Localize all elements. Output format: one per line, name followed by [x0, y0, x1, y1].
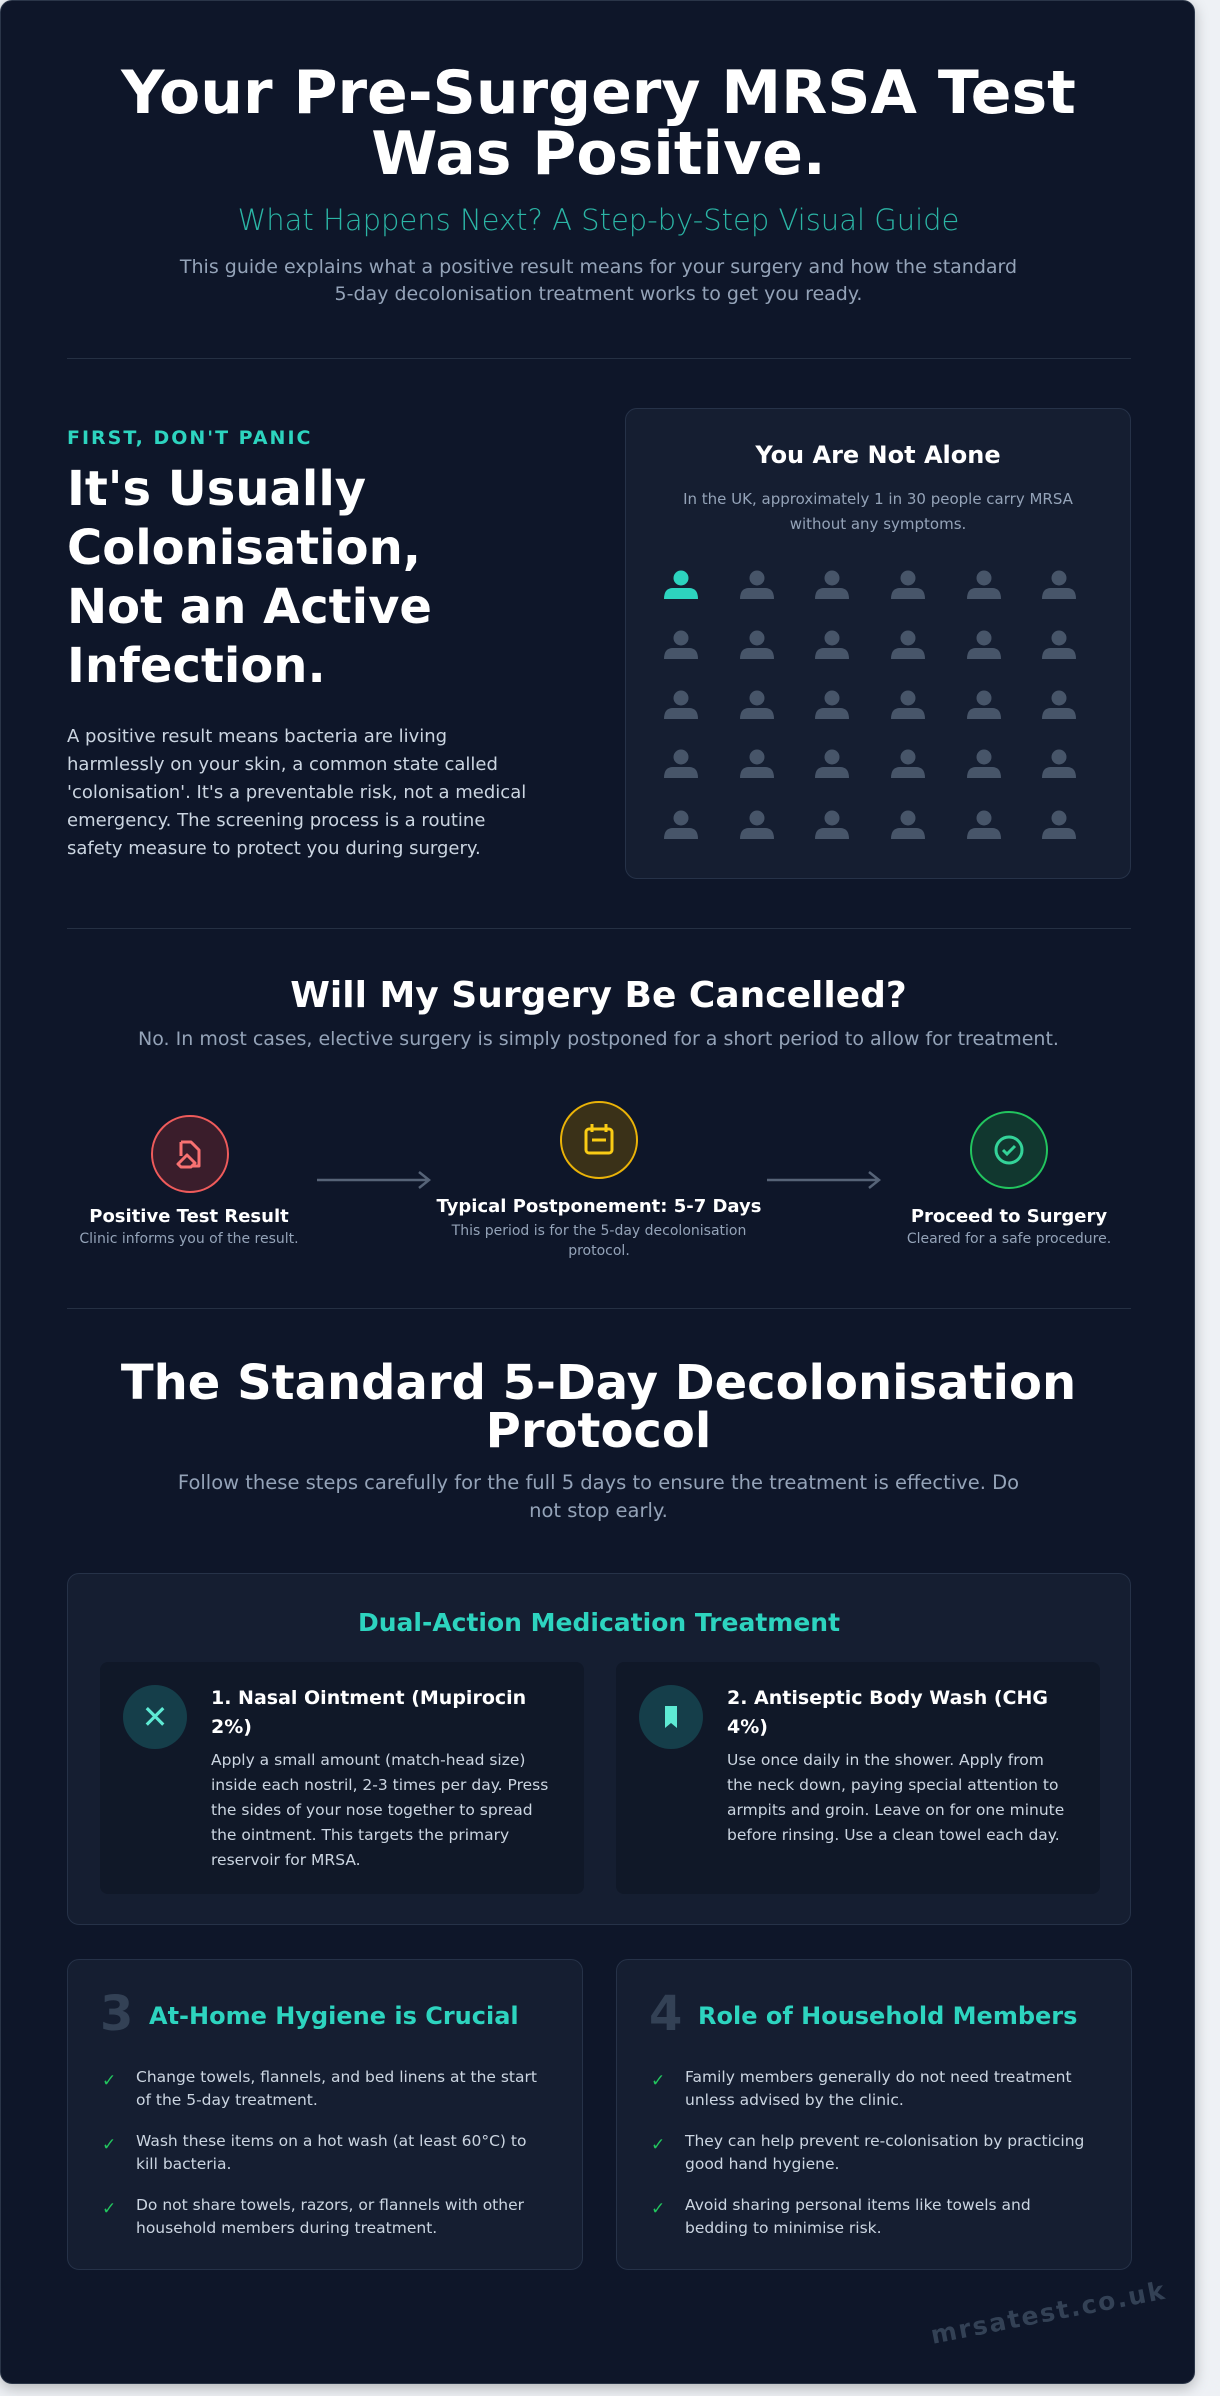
number 4: 4 — [649, 1986, 682, 2042]
icon: document — [151, 1115, 229, 1193]
panel title: You Are Not Alone — [755, 441, 1001, 469]
checklist: Wash these items on a hot wash (at least 60°C) to kill bacteria. — [136, 2132, 526, 2173]
icon: calendar — [560, 1101, 638, 1179]
checklist — [102, 2068, 537, 2237]
panel: at-home hygiene: ✓ — [102, 2071, 116, 2091]
arrow 2 — [767, 1171, 881, 1189]
heading: colonisation: It's Usually Colonisation, Not an Active Infection. — [67, 461, 432, 694]
eyebrow: first don't panic: FIRST, DON'T PANIC — [67, 427, 312, 449]
panel: household members: ✓ — [651, 2135, 665, 2155]
label: Typical Postponement: 5-7 Days — [437, 1196, 761, 1217]
step 1: positive test — [79, 1115, 299, 1247]
heading: Role of Household Members — [698, 2002, 1077, 2030]
heading: protocol: Protocol — [486, 1403, 711, 1459]
card 1: nasal ointment — [100, 1662, 584, 1894]
icon: x: ✕ — [142, 1698, 168, 1736]
card 2: body wash — [616, 1662, 1100, 1894]
step 3: proceed — [907, 1111, 1111, 1247]
caption: Clinic informs you of the result. — [79, 1231, 299, 1247]
panel title: Dual-Action Medication Treatment — [358, 1608, 840, 1637]
checklist: Family members generally do not need treatment unless advised by the clinic. — [685, 2068, 1072, 2109]
checklist: They can help prevent re-colonisation by practicing good hand hygiene. — [685, 2132, 1084, 2173]
timeline — [79, 1101, 1111, 1259]
title: 2. Antiseptic Body Wash (CHG 4%) — [727, 1687, 1048, 1738]
number 3: 3 — [100, 1986, 133, 2042]
checklist — [651, 2068, 1084, 2237]
arrow 1 — [317, 1171, 431, 1189]
panel text: In the UK, approximately 1 in 30 people carry MRSA without any symptoms. — [683, 490, 1073, 533]
panel: household members: ✓ — [651, 2199, 665, 2219]
checklist: Avoid sharing personal items like towels and bedding to minimise risk. — [685, 2196, 1031, 2237]
title — [120, 58, 1076, 189]
step 2: postponement — [436, 1101, 761, 1259]
panel: at-home hygiene: ✓ — [102, 2135, 116, 2155]
icon grid: people — [664, 570, 1076, 839]
body: Use once daily in the shower. Apply from the neck down, paying special attention to armpits and groin. Leave on for one minute before rinsing. Use a clean towel each day. — [727, 1751, 1064, 1844]
caption: This period is for the 5-day decolonisation protocol. — [452, 1223, 746, 1259]
checklist: Change towels, flannels, and bed linens at the start of the 5-day treatment. — [136, 2068, 537, 2109]
title: 1. Nasal Ointment (Mupirocin 2%) — [211, 1687, 526, 1738]
icon: bookmark — [639, 1685, 703, 1749]
panel: dual-action medication — [67, 1573, 1131, 1925]
panel: at-home hygiene: ✓ — [102, 2199, 116, 2219]
icon: check — [970, 1111, 1048, 1189]
label: Positive Test Result — [89, 1206, 289, 1227]
intro text: 5-day decolonisation treatment works to get you ready. — [335, 283, 862, 305]
panel: household members: ✓ — [651, 2071, 665, 2091]
heading: At-Home Hygiene is Crucial — [149, 2002, 519, 2030]
paragraph: colonisation explanation: A positive result means bacteria are living harmlessly on your skin, a common state called 'colonisation'. It's a preventable risk, not a medical emergency. The screening process is a routine safety measure to protect you during surgery. — [67, 726, 526, 859]
protocol subtext: Follow these steps carefully for the full 5 days to ensure the treatment is effective. Do not stop early. — [178, 1471, 1019, 1522]
subtitle: What Happens Next? A Step-by-Step Visual Guide — [238, 203, 959, 237]
label: Proceed to Surgery — [911, 1206, 1107, 1227]
panel: you are not alone — [625, 408, 1131, 879]
heading: protocol: The Standard 5-Day Decolonisation — [121, 1355, 1076, 1411]
icon: x — [123, 1685, 187, 1749]
heading: protocol — [121, 1355, 1076, 1459]
checklist: Do not share towels, razors, or flannels with other household members during treatment. — [136, 2196, 524, 2237]
watermark: mrsatest.co.uk — [928, 2276, 1169, 2350]
intro text — [180, 256, 1017, 305]
caption: Cleared for a safe procedure. — [907, 1231, 1111, 1247]
title: Was Positive. — [371, 119, 826, 189]
panel: household members — [616, 1959, 1132, 2270]
title: Your Pre-Surgery MRSA Test — [121, 58, 1076, 128]
body: Apply a small amount (match-head size) inside each nostril, 2-3 times per day. Press the sides of your nose together to spread the ointment. This targets the primary reservoir for MRSA. — [211, 1751, 548, 1869]
panel: at-home hygiene — [67, 1959, 583, 2270]
intro text: This guide explains what a positive result means for your surgery and how the standard — [180, 256, 1017, 278]
heading: will surgery be cancelled: Will My Surgery Be Cancelled? — [290, 975, 907, 1016]
subtext: No. In most cases, elective surgery is simply postponed for a short period to allow for treatment. — [138, 1028, 1059, 1050]
